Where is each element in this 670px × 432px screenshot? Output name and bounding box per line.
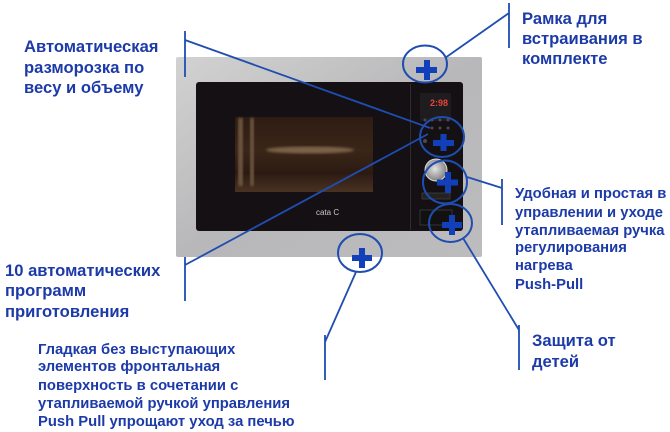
text: frame: комплекте <box>522 49 608 68</box>
text: auto defrost: разморозка по <box>24 58 144 77</box>
display: 2:98 <box>430 98 448 108</box>
text: knob: регулирования <box>515 240 627 256</box>
oven window <box>235 117 373 192</box>
text: child lock: детей <box>532 352 579 371</box>
text: auto programs: программ <box>5 281 86 300</box>
stainless steel frame <box>176 57 482 257</box>
text: auto programs: 10 автоматических <box>5 261 161 280</box>
text: smooth surface: элементов фронтальная <box>38 359 220 375</box>
text: knob: нагрева <box>515 258 573 274</box>
text: frame: встраивания в <box>522 29 643 48</box>
text: auto programs: приготовления <box>5 302 129 321</box>
marker: panel <box>420 117 464 157</box>
text: smooth surface: Push Pull упрощают уход за печью <box>38 414 295 430</box>
text: smooth surface: утапливаемой ручкой управления <box>38 396 290 412</box>
text: child lock: Защита от <box>532 331 616 350</box>
text: smooth surface: поверхность в сочетании с <box>38 378 238 394</box>
microwave oven <box>176 57 482 257</box>
marker: surface <box>338 234 382 272</box>
text: knob: Push-Pull <box>515 277 583 293</box>
text: auto defrost: Автоматическая <box>24 37 158 56</box>
control knob <box>425 159 447 181</box>
text: knob: Удобная и простая в <box>515 186 666 202</box>
callout lines <box>185 3 519 380</box>
marker: child lock <box>429 204 472 242</box>
small control strip <box>422 193 450 199</box>
panel divider <box>410 84 411 230</box>
marker: frame <box>403 46 447 82</box>
text: smooth surface: Гладкая без выступающих <box>38 342 236 358</box>
text: knob: управлении и уходе <box>515 205 663 221</box>
text: auto defrost: весу и объему <box>24 78 144 97</box>
text: knob: утапливаемая ручка <box>515 223 665 239</box>
cata logo: cata C <box>316 208 339 217</box>
plus markers <box>338 46 472 272</box>
door release button <box>420 210 452 225</box>
marker: knob <box>423 160 467 204</box>
black door and control panel <box>196 82 463 231</box>
program buttons <box>423 118 450 143</box>
display <box>420 93 451 121</box>
text: frame: Рамка для <box>522 9 607 28</box>
